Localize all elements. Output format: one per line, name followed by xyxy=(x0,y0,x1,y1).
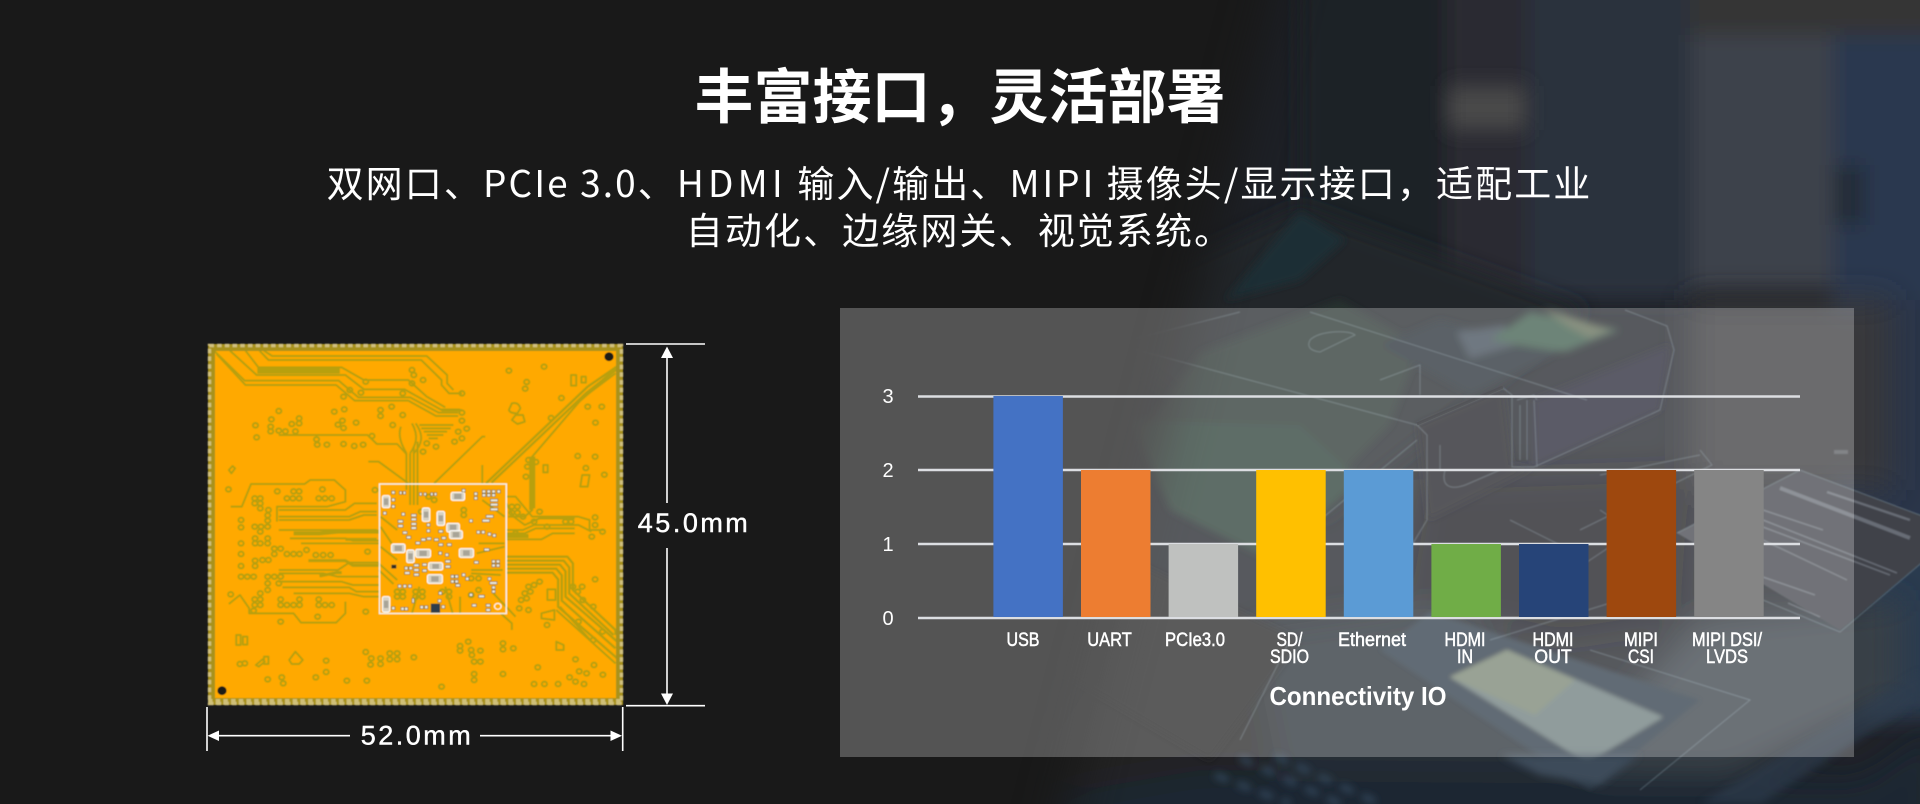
x axis labels: CSI xyxy=(1628,647,1654,668)
centre vertical bus xyxy=(406,442,418,505)
chart title: Connectivity IO xyxy=(1270,681,1446,711)
y axis labels: 1 xyxy=(882,534,894,556)
vias xyxy=(226,364,607,689)
PCB board xyxy=(208,344,623,705)
x axis labels: LVDS xyxy=(1706,647,1748,668)
x axis labels: SDIO xyxy=(1270,647,1309,668)
y axis labels: 0 xyxy=(882,608,894,630)
x axis labels: UART xyxy=(1087,630,1132,651)
x axis labels: HDMI xyxy=(1444,630,1486,651)
dimension: width 52.0mm xyxy=(207,707,623,751)
title: 丰富接口，灵活部署 xyxy=(694,50,1226,135)
castellated edge pads xyxy=(208,346,623,704)
x axis labels xyxy=(1006,630,1763,668)
inside SoC area xyxy=(381,500,504,613)
x axis labels: Ethernet xyxy=(1338,630,1407,651)
chip xyxy=(431,604,440,613)
right-up diagonal bus xyxy=(486,365,619,483)
x axis labels: SD/ xyxy=(1276,630,1303,651)
x axis labels: MIPI xyxy=(1624,630,1658,651)
component highlights xyxy=(382,492,473,612)
background photo: blurred circuit board device xyxy=(1064,0,1920,804)
dimension: height 45.0mm: 45.0mm xyxy=(638,508,748,538)
subtitle text: 自动化、边缘网关、视觉系统。 xyxy=(686,201,1233,255)
mounting holes xyxy=(217,352,614,695)
y axis labels xyxy=(882,386,894,630)
bottom reflections xyxy=(1215,756,1380,804)
subtitle text xyxy=(327,154,1592,255)
y axis labels: 2 xyxy=(882,460,894,482)
dimension: width 52.0mm: 52.0mm xyxy=(361,720,471,750)
bright card xyxy=(1380,612,1700,790)
y axis labels: 3 xyxy=(882,386,894,408)
bar chart: connectivity IO xyxy=(882,386,1800,711)
small passives xyxy=(383,489,500,611)
left top loop xyxy=(231,480,345,522)
SoC area: white outline and components xyxy=(380,484,506,614)
x axis labels: OUT xyxy=(1534,647,1572,668)
device line art xyxy=(1182,310,1920,790)
x axis labels: PCIe3.0 xyxy=(1165,630,1225,651)
x axis labels: USB xyxy=(1006,630,1040,651)
top-left bus xyxy=(217,354,458,416)
dimension: height 45.0mm xyxy=(626,344,748,706)
copper traces xyxy=(214,351,619,689)
x axis labels: MIPI DSI/ xyxy=(1692,630,1763,651)
left centre buses xyxy=(294,532,379,533)
bars xyxy=(993,396,1764,617)
subtitle text: 双网口、PCIe 3.0、HDMI 输入/输出、MIPI 摄像头/显示接口，适配工业 xyxy=(327,154,1592,208)
right buses xyxy=(506,497,604,530)
x axis labels: HDMI xyxy=(1532,630,1574,651)
x axis labels: IN xyxy=(1457,647,1473,668)
illegible plate markings xyxy=(1763,488,1910,617)
pads outlines xyxy=(509,403,525,424)
